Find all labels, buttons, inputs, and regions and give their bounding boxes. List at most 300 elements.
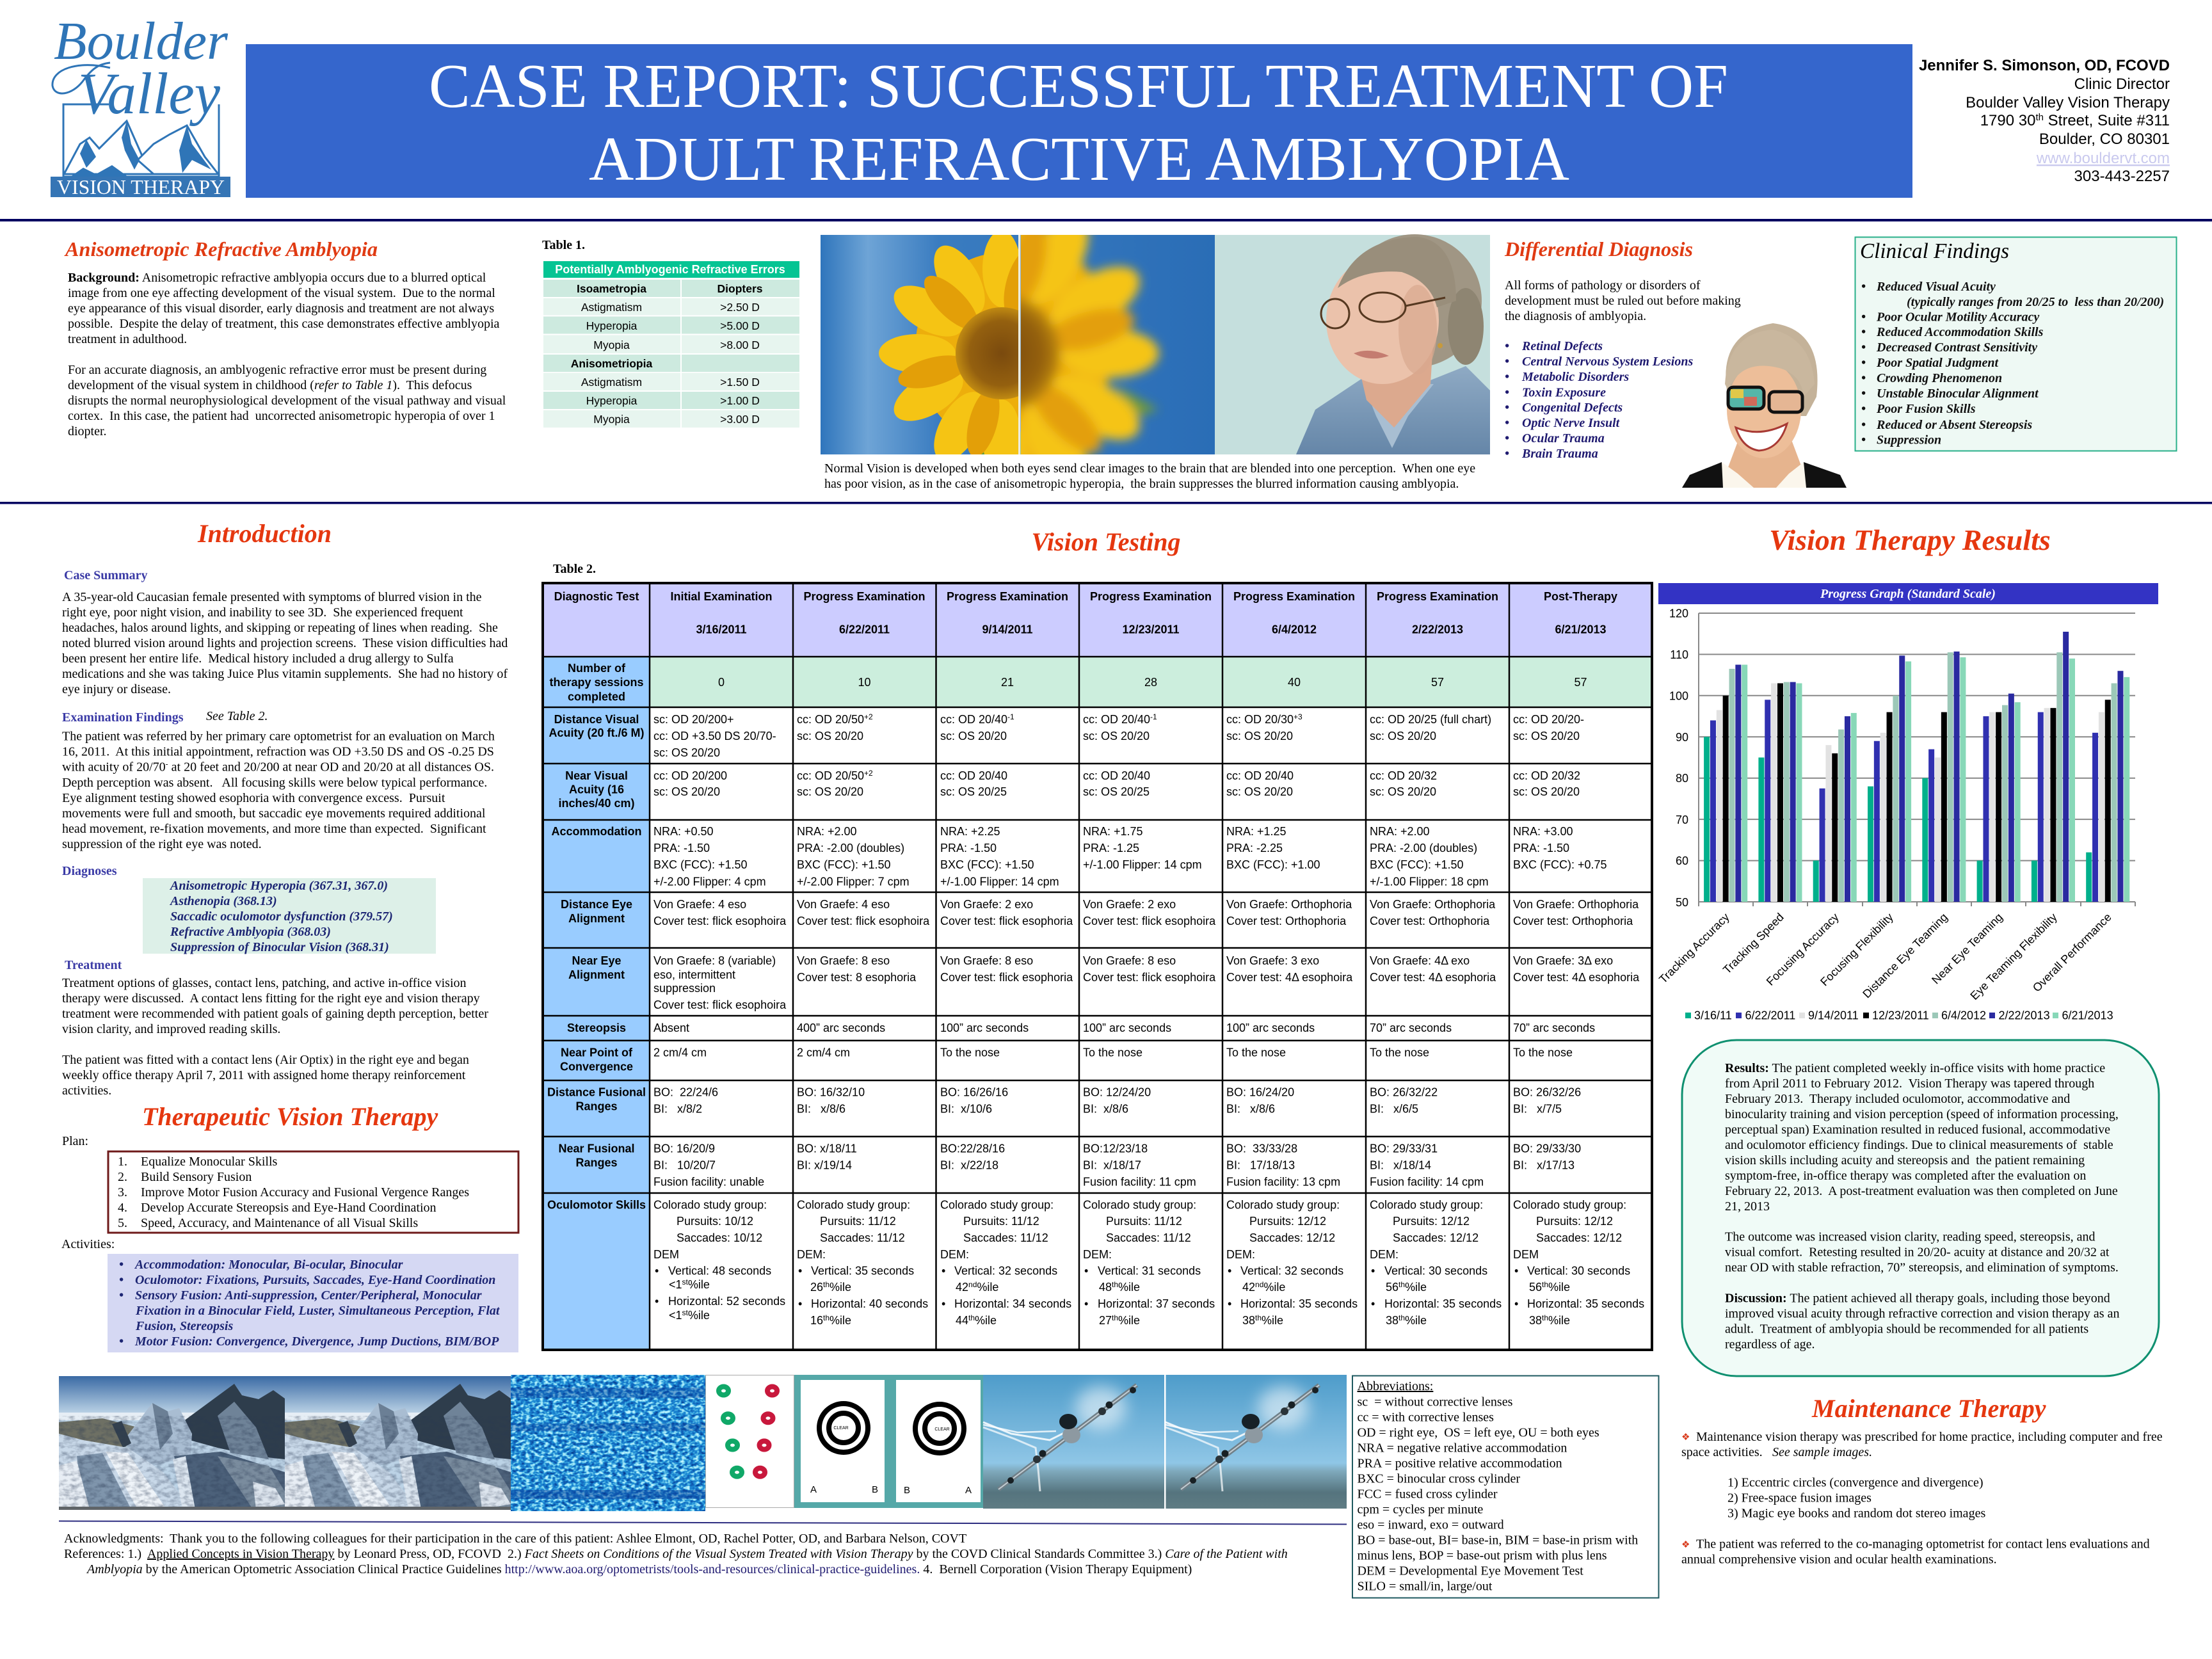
table 1: refractive errors: Anisometriopia [571,357,652,370]
row: oculomotor skills: Horizontal: 35 seconds [1240,1297,1358,1310]
table 1: refractive errors: Astigmatism [581,301,642,314]
row: near visual acuity: sc: OS 20/20 [1513,785,1580,798]
panel: therapeutic vision therapy: 5. [118,1216,127,1230]
row: oculomotor skills: %ile [975,1314,997,1327]
row: distance visual acuity: sc: OS 20/20 [1513,730,1580,742]
row: accommodation: Accommodation [551,825,642,838]
panel: therapeutic vision therapy: Build Sensory Fusion [141,1170,252,1184]
row: distance fusional ranges: BI: x/10/6 [940,1102,992,1115]
panel: clinical findings: • [1861,371,1866,385]
row: oculomotor skills: Oculomotor Skills [547,1198,646,1211]
row: oculomotor skills: th [823,1280,830,1289]
row: oculomotor skills: 56 [1529,1281,1542,1294]
row: near point of convergence: To the nose [1513,1046,1573,1059]
row: oculomotor skills: th [1255,1313,1262,1322]
x-axis category labels [1656,911,2114,1002]
row: near eye alignment: Von Graefe: 8 (variable) [653,954,776,967]
chart legend: 6/21/2013 [2062,1009,2113,1022]
row: near point of convergence: Convergence [560,1060,633,1073]
panel: introduction: noted blurred vision around lights and projection screens. These vision difficulties had [62,636,508,650]
panel: differential diagnosis: • [1505,370,1509,384]
row: distance fusional ranges: BO: 12/24/20 [1083,1086,1151,1098]
panel: clinical findings: (typically ranges from 20/25 to less than 20/200) [1907,295,2164,309]
acknowledgments and references: Amblyopia by the American Optometric Association Clinical Practice Guidelines http://www.aoa.org/optometrists/tools-and-resources/clinical-practice-guidelines. 4. Bernell Corporation (Vision Therapy Equipment) [86,1562,1192,1576]
row: stereopsis: 400” arc seconds [797,1022,885,1034]
panel: results and discussion: February 22, 2013. A post-treatment evaluation was then completed on June [1725,1184,2118,1198]
image: random dot stereogram [511,1375,705,1511]
row: distance eye alignment: Von Graefe: 2 exo [1083,898,1176,911]
row: near fusional ranges: BI: 17/18/13 [1226,1158,1295,1171]
table 1: refractive errors: >1.50 D [720,376,760,389]
panel: introduction: Refractive Amblyopia (368.03) [170,925,331,939]
panel: abbreviations: cc = with corrective lenses [1357,1411,1494,1425]
row: oculomotor skills: th [1112,1280,1118,1289]
row: oculomotor skills: Pursuits: 12/12 [1249,1215,1326,1228]
panel: clinical findings: • [1861,418,1866,432]
row: near visual acuity: cc: OD 20/200 [653,769,727,782]
row: oculomotor skills: Vertical: 31 seconds [1098,1265,1201,1278]
row: distance visual acuity: sc: OS 20/20 [940,730,1007,742]
row: oculomotor skills: • [1514,1297,1518,1310]
row: oculomotor skills: th [1399,1313,1405,1322]
row: distance eye alignment: Von Graefe: 2 exo [940,898,1033,911]
row: number of therapy sessions: Number of [568,662,626,675]
table header row: 9/14/2011 [982,623,1033,636]
y-axis labels: 100 [1669,690,1688,703]
row: distance fusional ranges: BI: x/6/5 [1370,1102,1418,1115]
panel: clinical findings: Crowding Phenomenon [1877,371,2002,385]
row: near fusional ranges: Ranges [575,1156,618,1169]
x-axis category labels: Tracking Accuracy [1656,911,1732,986]
row: oculomotor skills: • [655,1265,659,1278]
row: oculomotor skills: Horizontal: 35 seconds [1527,1297,1644,1310]
row: distance fusional ranges: BO: 26/32/26 [1513,1086,1581,1098]
row: distance eye alignment [561,898,1639,927]
panel: maintenance therapy: ❖ [1681,1431,1690,1443]
row: distance fusional ranges: Ranges [575,1100,618,1112]
table 1: refractive errors: Myopia [593,413,630,426]
row: oculomotor skills: • [655,1295,659,1308]
row: near visual acuity: cc: OD 20/50 [797,769,864,782]
panel: therapeutic vision therapy: Equalize Monocular Skills [141,1155,278,1169]
table header row: 3/16/2011 [696,623,747,636]
panel: anisometropic refractive amblyopia: Anisometropic Refractive Amblyopia [64,237,378,260]
row: near eye alignment: Cover test: flick esophoira [653,998,787,1011]
panel: clinical findings: Reduced or Absent Stereopsis [1876,418,2032,432]
row: near fusional ranges: BO: x/18/11 [797,1142,857,1155]
row: near fusional ranges: BO: 29/33/30 [1513,1142,1581,1155]
panel: therapeutic vision therapy: 1. [118,1155,127,1169]
row: oculomotor skills: Horizontal: 34 seconds [954,1297,1071,1310]
panel: clinical findings: • [1861,433,1866,447]
panel: introduction: been present her entire life. Medical history included a drug allergy to Sulfa [62,652,454,666]
row: accommodation [551,825,1607,888]
row: oculomotor skills: • [1084,1297,1088,1310]
row: oculomotor skills: %ile [830,1314,851,1327]
row: oculomotor skills: Saccades: 11/12 [963,1231,1048,1244]
panel: clinical findings: Reduced Visual Acuity [1876,280,1996,294]
panel: differential diagnosis: • [1505,401,1509,415]
chart legend [1685,1009,2113,1022]
table 1: refractive errors: >5.00 D [720,319,760,332]
panel: results and discussion: visual comfort. Retesting resulted in 20/20- acuity at distance and 20/32 at [1725,1246,2110,1260]
heading: vision therapy results: Vision Therapy Results [1769,524,2051,556]
panel: introduction: The patient was referred by her primary care optometrist for an evaluation on March [62,730,495,744]
panel: introduction: Saccadic oculomotor dysfunction (379.57) [170,910,393,924]
row: distance visual acuity: cc: OD 20/40 [940,713,1007,726]
row: oculomotor skills: Vertical: 30 seconds [1384,1265,1487,1278]
row: number of therapy sessions: 57 [1574,676,1587,689]
row: distance visual acuity: cc: OD 20/25 (full chart) [1370,713,1491,726]
row: oculomotor skills: • [1084,1265,1088,1278]
row: near eye alignment: Cover test: 4Δ esophoria [1513,971,1640,984]
panel: clinical findings: Unstable Binocular Alignment [1877,387,2039,401]
row: number of therapy sessions: 57 [1431,676,1444,689]
panel: differential diagnosis: • [1505,385,1509,399]
image: eccentric circles cards: CLEAR [934,1427,950,1432]
row: distance fusional ranges: BI: x/8/6 [1226,1102,1275,1115]
panel: differential diagnosis: • [1505,416,1509,430]
panel: abbreviations: sc = without corrective lenses [1357,1395,1513,1409]
row: accommodation: BXC (FCC): +1.50 [1370,858,1464,871]
row: near eye alignment: Von Graefe: 3 exo [1226,954,1319,967]
table 1: refractive errors: Table 1. [542,238,585,252]
panel: results and discussion: Discussion: The patient achieved all therapy goals, including those beyond [1725,1292,2110,1306]
row: accommodation: PRA: -2.00 (doubles) [1370,842,1477,854]
row: stereopsis: Stereopsis [567,1022,626,1034]
panel: anisometropic refractive amblyopia: disrupts the normal neurophysiological development of the visual pathway and visual [68,394,506,408]
panel: therapeutic vision therapy: Fusion, Stereopsis [135,1319,233,1333]
panel: maintenance therapy: annual comprehensive vision and ocular health examinations. [1681,1553,1997,1567]
row: stereopsis: 70” arc seconds [1370,1022,1452,1034]
table 1: refractive errors: Hyperopia [586,319,637,332]
row: near visual acuity: cc: OD 20/40 [940,769,1007,782]
row: near point of convergence [560,1046,1573,1073]
panel: results and discussion: from April 2011 to February 2012. Vision Therapy was tapered through [1725,1077,2094,1091]
table header row: Progress Examination [803,590,926,603]
row: distance eye alignment: Von Graefe: Orthophoria [1370,898,1496,911]
row: near fusional ranges: Fusion facility: unable [653,1175,764,1188]
row: oculomotor skills: 44 [956,1314,968,1327]
panel: differential diagnosis: Optic Nerve Insult [1522,416,1621,430]
row: oculomotor skills: Vertical: 30 seconds [1527,1265,1630,1278]
panel: introduction: Examination Findings [62,710,184,725]
panel: introduction [62,519,508,1098]
panel: maintenance therapy: space activities. [1681,1445,1763,1459]
row: near visual acuity: cc: OD 20/40 [1083,769,1150,782]
row: distance fusional ranges: Distance Fusional [547,1086,646,1098]
row: accommodation: BXC (FCC): +0.75 [1513,858,1607,871]
panel: therapeutic vision therapy: • [119,1334,124,1349]
row: distance fusional ranges: BO: 16/32/10 [797,1086,865,1098]
table 1: refractive errors: Diopters [717,282,763,295]
row: oculomotor skills: %ile [1118,1281,1140,1294]
x-axis category labels: Tracking Speed [1720,911,1786,977]
row: oculomotor skills: 38 [1529,1314,1542,1327]
row: distance visual acuity: Distance Visual [554,713,639,726]
row: near point of convergence: 2 cm/4 cm [653,1046,707,1059]
author contact block: Clinic Director [2074,76,2170,93]
table header row: Post-Therapy [1544,590,1617,603]
panel: clinical findings: Clinical Findings [1860,239,2009,263]
row: oculomotor skills: <1 [669,1309,682,1322]
panel: abbreviations: cpm = cycles per minute [1357,1503,1483,1517]
row: near eye alignment: Cover test: 8 esophoria [797,971,917,984]
row: oculomotor skills: %ile [1118,1314,1140,1327]
row: distance eye alignment: Cover test: flick esophoira [797,915,930,927]
panel: therapeutic vision therapy: Develop Accurate Stereopsis and Eye-Hand Coordination [141,1201,437,1215]
panel: introduction: 16, 2011. At this initial appointment, refraction was OD +3.50 DS and OS -0.25 DS [62,745,494,759]
row: oculomotor skills: Saccades: 12/12 [1536,1231,1622,1244]
panel: anisometropic refractive amblyopia: treatment in adulthood. [68,332,187,346]
row: oculomotor skills: 38 [1242,1314,1255,1327]
panel: clinical findings: Decreased Contrast Sensitivity [1876,341,2037,355]
panel: therapeutic vision therapy: Sensory Fusion: Anti-suppression, Center/Peripheral, Monocular [135,1288,482,1302]
row: near visual acuity: cc: OD 20/32 [1370,769,1437,782]
row: accommodation: BXC (FCC): +1.50 [940,858,1034,871]
panel: introduction: suppression of the right eye was noted. [62,837,262,851]
image: eccentric circles cards: A [965,1485,972,1496]
table 1: refractive errors: Hyperopia [586,394,637,407]
x-axis category labels: Eye Teaming Flexibility [1968,911,2060,1002]
chart legend: 9/14/2011 [1808,1009,1859,1022]
row: oculomotor skills: th [1542,1280,1548,1289]
row: oculomotor skills: %ile [1405,1281,1427,1294]
panel: clinical findings: • [1861,402,1866,416]
row: oculomotor skills: • [798,1297,802,1310]
image: eccentric circles cards: A [810,1484,817,1495]
panel: introduction: A 35-year-old Caucasian female presented with symptoms of blurred vision in the [62,590,482,604]
x-axis category labels: Distance Eye Teaming [1860,911,1950,1000]
panel: differential diagnosis: Brain Trauma [1521,447,1598,461]
chart legend: 6/22/2011 [1745,1009,1795,1022]
row: oculomotor skills: DEM: [1226,1248,1255,1261]
panel: introduction: Suppression of Binocular Vision (368.31) [170,940,389,954]
panel: maintenance therapy: ❖ [1681,1539,1690,1550]
table 2: diagnostic test results [543,562,1652,1350]
row: number of therapy sessions: completed [568,690,625,703]
author contact block: Street, Suite #311 [2044,112,2170,129]
table 1: refractive errors [542,238,799,428]
row: near fusional ranges: Fusion facility: 13 cpm [1226,1175,1340,1188]
panel: abbreviations: BXC = binocular cross cylinder [1357,1472,1520,1486]
row: near eye alignment: Von Graefe: 8 eso [797,954,890,967]
table header row: 6/21/2013 [1555,623,1607,636]
row: distance visual acuity [549,712,1584,759]
row: distance fusional ranges: BO: 22/24/6 [653,1086,718,1098]
panel: introduction: headaches, halos around lights, and skipping or repeating of lines when reading. She [62,621,498,635]
row: accommodation: PRA: -1.25 [1083,842,1139,854]
image: free-space fusion mountains [59,1376,511,1510]
row: near fusional ranges: BI: x/22/18 [940,1158,998,1171]
row: distance eye alignment: Cover test: flick esophoria [940,915,1073,927]
row: oculomotor skills: Colorado study group: [940,1198,1054,1211]
row: oculomotor skills: th [1399,1280,1405,1289]
image: free-space fusion airplanes [983,1375,1347,1509]
row: number of therapy sessions: 21 [1001,676,1014,689]
author contact block: th [2035,112,2044,123]
image: eccentric circles cards: B [872,1484,878,1495]
row: distance fusional ranges: BO: 26/32/22 [1370,1086,1438,1098]
panel: anisometropic refractive amblyopia: cortex. In this case, the patient had uncorrected anisometropic hyperopia of over 1 [68,409,495,423]
panel: clinical findings: Poor Ocular Motility Accuracy [1876,310,2039,324]
panel: therapeutic vision therapy: Fixation in a Binocular Field, Luster, Simultaneous Perception, Flat [135,1304,501,1318]
row: accommodation: NRA: +3.00 [1513,825,1573,838]
panel: maintenance therapy: Maintenance vision therapy was prescribed for home practice, including computer and free [1696,1430,2163,1444]
row: near fusional ranges: Fusion facility: 14 cpm [1370,1175,1484,1188]
table 2: diagnostic test results: Table 2. [553,562,596,576]
row: oculomotor skills: • [1228,1265,1231,1278]
table header row: 12/23/2011 [1122,623,1180,636]
panel: abbreviations: PRA = positive relative accommodation [1357,1457,1562,1471]
row: oculomotor skills: Horizontal: 52 seconds [668,1295,785,1308]
row: near fusional ranges: Fusion facility: 11 cpm [1083,1175,1196,1188]
panel: differential diagnosis: • [1505,355,1509,369]
panel: results and discussion: near OD with stable refraction, 70” stereopsis, and elimination of symptoms. [1725,1261,2119,1275]
table header row: Initial Examination [670,590,773,603]
panel: results and discussion: The outcome was increased vision clarity, reading speed, stereopsis, and [1725,1230,2096,1244]
row: near visual acuity: cc: OD 20/40 [1226,769,1294,782]
panel: therapeutic vision therapy: Improve Motor Fusion Accuracy and Fusional Vergence Ranges [141,1185,469,1199]
row: oculomotor skills: • [942,1265,945,1278]
panel: abbreviations: OD = right eye, OS = left eye, OU = both eyes [1357,1426,1599,1440]
image: eccentric circles cards [794,1375,983,1508]
row: near fusional ranges [558,1142,1581,1188]
row: accommodation: NRA: +0.50 [653,825,714,838]
row: number of therapy sessions: therapy sessions [549,676,644,689]
row: oculomotor skills: DEM: [797,1248,826,1261]
row: near fusional ranges: BI: x/19/14 [797,1158,852,1171]
x-axis category labels: Focusing Accuracy [1764,911,1841,988]
panel: maintenance therapy: Maintenance Therapy [1811,1394,2046,1423]
panel: therapeutic vision therapy: Oculomotor: Fixations, Pursuits, Saccades, Eye-Hand Coordination [135,1273,495,1287]
row: stereopsis: 70” arc seconds [1513,1022,1595,1034]
row: oculomotor skills: • [1514,1265,1518,1278]
row: distance visual acuity: sc: OS 20/20 [1083,730,1150,742]
title banner: ADULT REFRACTIVE AMBLYOPIA [589,125,1569,194]
row: oculomotor skills: Colorado study group: [1370,1198,1483,1211]
row: oculomotor skills: 27 [1099,1314,1112,1327]
row: oculomotor skills [547,1198,1644,1327]
logo: Boulder Valley Vision Therapy: Valley [78,61,220,126]
row: distance eye alignment: Von Graefe: Orthophoria [1226,898,1352,911]
row: distance fusional ranges: BI: x/7/5 [1513,1102,1562,1115]
row: oculomotor skills: • [1228,1297,1231,1310]
row: distance visual acuity: sc: OD 20/200+ [653,713,734,726]
row: oculomotor skills: Pursuits: 10/12 [677,1215,753,1228]
title banner: CASE REPORT: SUCCESSFUL TREATMENT OF [429,52,1728,121]
row: oculomotor skills: Colorado study group: [1226,1198,1340,1211]
panel: differential diagnosis [1504,237,1741,461]
panel: therapeutic vision therapy: • [119,1258,124,1272]
image: woman with glasses [1215,234,1490,454]
row: distance eye alignment: Cover test: flick esophoira [1083,915,1216,927]
chart: progress graph: Progress Graph (Standard Scale) [1820,587,1996,601]
panel: differential diagnosis: Congenital Defects [1522,401,1623,415]
panel: results and discussion: and oculomotor efficiency findings. Due to clinical measurements of stable [1725,1138,2113,1152]
row: number of therapy sessions: 28 [1144,676,1157,689]
panel: maintenance therapy: 1) Eccentric circles (convergence and divergence) [1727,1476,1984,1490]
image caption: Normal Vision is developed when both eyes send clear images to the brain that are blended into one perception. When one eye [824,461,1475,476]
row: accommodation: BXC (FCC): +1.50 [653,858,748,871]
panel: introduction: eye injury or disease. [62,682,171,696]
row: oculomotor skills: th [968,1313,975,1322]
row: accommodation: NRA: +2.00 [797,825,857,838]
panel: abbreviations: Abbreviations: [1357,1379,1433,1393]
row: near fusional ranges: BO: 16/20/9 [653,1142,715,1155]
row: oculomotor skills: Horizontal: 40 seconds [811,1297,928,1310]
row: accommodation: +/-2.00 Flipper: 4 cpm [653,876,766,888]
logo: Boulder Valley Vision Therapy: VISION THERAPY [57,175,225,198]
row: distance visual acuity: +2 [864,712,873,721]
row: distance fusional ranges: BO: 16/24/20 [1226,1086,1294,1098]
panel: clinical findings: • [1861,310,1866,324]
panel: results and discussion: improved visual acuity through refractive correction and vision therapy as an [1725,1307,2119,1321]
image: smiling woman with patterned lens [1682,323,1847,488]
row: oculomotor skills: <1 [669,1278,682,1291]
row: oculomotor skills: Saccades: 10/12 [677,1231,762,1244]
row: near eye alignment: Cover test: 4Δ esophoria [1370,971,1496,984]
panel: introduction: Asthenopia (368.13) [169,894,277,908]
row: oculomotor skills: %ile [1263,1281,1285,1294]
row: near eye alignment: eso, intermittent [653,968,735,981]
row: oculomotor skills: 38 [1386,1314,1399,1327]
row: near visual acuity: inches/40 cm) [558,797,635,810]
table 1: refractive errors: >1.00 D [720,394,760,407]
row: near fusional ranges: BI: 10/20/7 [653,1158,716,1171]
y-axis labels: 90 [1676,731,1688,744]
row: near eye alignment: Cover test: flick esophoria [940,971,1073,984]
row: distance eye alignment: Von Graefe: Orthophoria [1513,898,1639,911]
author contact block: 303-443-2257 [2074,168,2170,185]
panel: differential diagnosis: Metabolic Disorders [1521,370,1629,384]
row: near point of convergence: To the nose [1226,1046,1286,1059]
row: near fusional ranges: BI: x/18/14 [1370,1158,1431,1171]
y-axis labels: 80 [1676,772,1688,785]
panel: differential diagnosis: Differential Diagnosis [1504,237,1693,260]
chart legend: 3/16/11 [1694,1009,1732,1022]
panel: introduction: weekly office therapy April 7, 2011 with assigned home therapy reinforcement [62,1068,466,1082]
row: accommodation: +/-1.00 Flipper: 14 cpm [1083,858,1202,871]
row: oculomotor skills: Colorado study group: [1083,1198,1196,1211]
panel: abbreviations: minus lens, BOP = base-out prism with plus lens [1357,1549,1607,1563]
chart: progress graph [1656,583,2158,1022]
y-axis labels: 120 [1669,607,1688,620]
panel: clinical findings: Poor Fusion Skills [1876,402,1976,416]
row: oculomotor skills: Pursuits: 11/12 [1106,1215,1182,1228]
author contact block: www.bouldervt.com [2036,150,2170,167]
author contact block: Jennifer S. Simonson, OD, FCOVD [1919,57,2170,74]
panel: introduction: Treatment [65,958,122,972]
row: oculomotor skills: Saccades: 12/12 [1393,1231,1479,1244]
row: distance eye alignment: Von Graefe: 4 eso [653,898,746,911]
row: oculomotor skills: Pursuits: 11/12 [963,1215,1039,1228]
row: oculomotor skills: %ile [688,1309,710,1322]
row: near point of convergence: Near Point of [561,1046,633,1059]
row: oculomotor skills: DEM [1513,1248,1539,1261]
row: near eye alignment: Cover test: flick esophoira [1083,971,1216,984]
row: distance visual acuity: cc: OD 20/50 [797,713,864,726]
panel: results and discussion: binocularity training and vision perception (speed of information processing, [1725,1107,2119,1121]
y-axis labels: 50 [1676,896,1688,909]
panel: introduction: activities. [62,1084,111,1098]
row: distance fusional ranges: BI: x/8/6 [797,1102,846,1115]
row: oculomotor skills: Pursuits: 12/12 [1536,1215,1613,1228]
row: distance visual acuity: -1 [1007,712,1014,721]
row: oculomotor skills: DEM [653,1248,679,1261]
table 1: refractive errors: >2.50 D [720,301,760,314]
row: oculomotor skills: st [682,1308,689,1317]
